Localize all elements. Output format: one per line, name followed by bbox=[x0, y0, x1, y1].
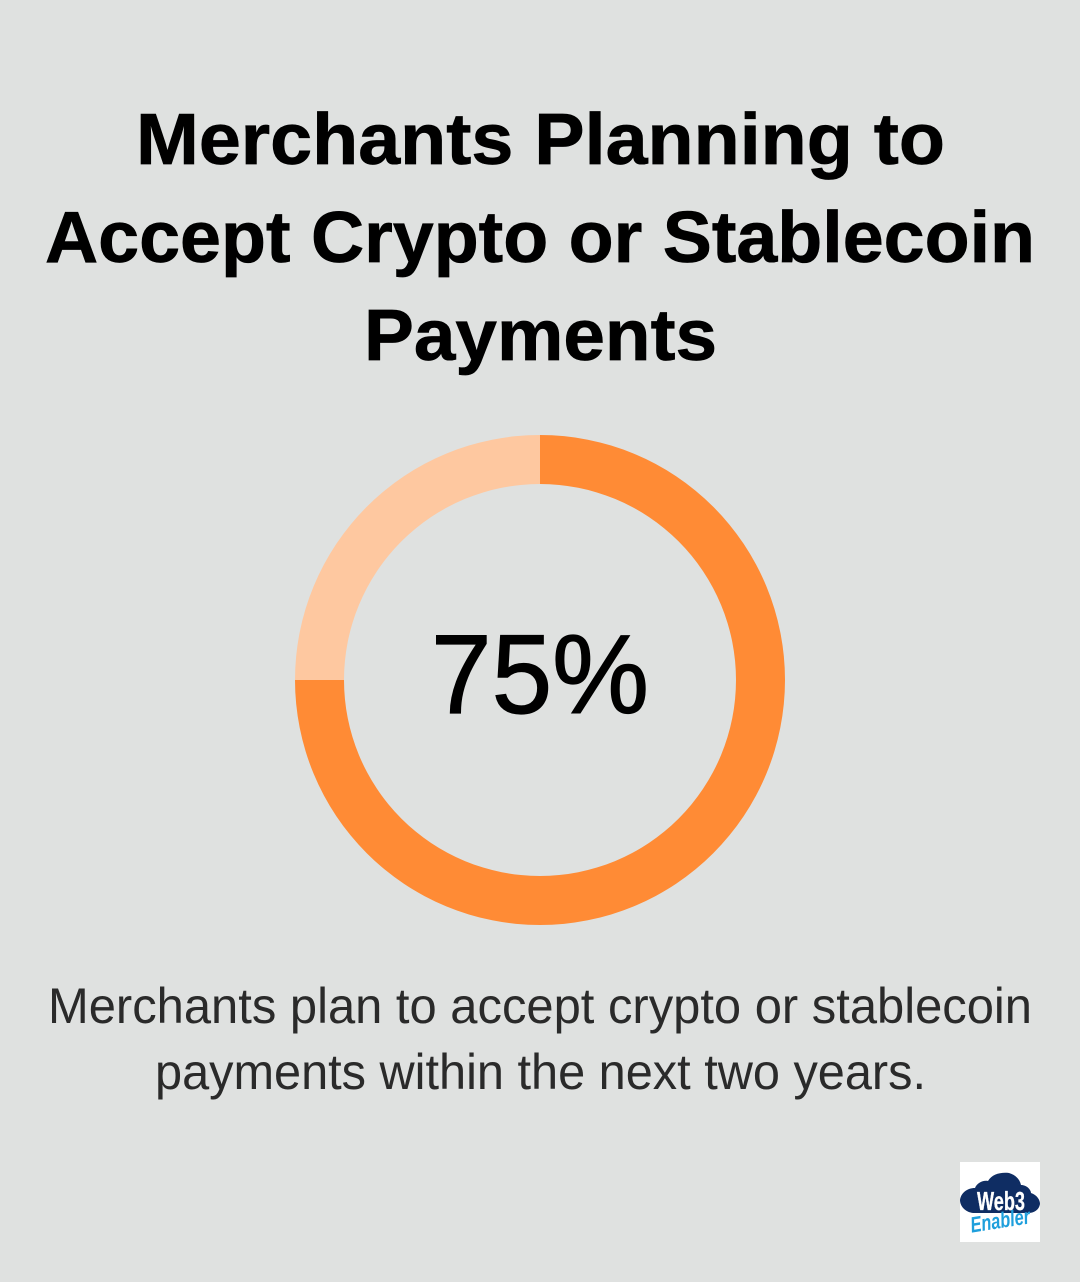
title bbox=[45, 100, 1035, 376]
logo script: Enabler bbox=[968, 1203, 1033, 1238]
description text bbox=[48, 978, 1032, 1100]
logo wordmark: Web3 bbox=[977, 1186, 1025, 1216]
title: Merchants Planning to bbox=[136, 100, 945, 180]
highlighted 75% segment bbox=[295, 435, 785, 925]
description text: payments within the next two years. bbox=[155, 1044, 926, 1100]
donut chart: 75% bbox=[295, 435, 785, 925]
description text: Merchants plan to accept crypto or stablecoin bbox=[48, 978, 1032, 1034]
title: Accept Crypto or Stablecoin bbox=[45, 198, 1035, 278]
logo: Web3 Enabler bbox=[960, 1162, 1040, 1242]
logo cloud bbox=[960, 1173, 1040, 1213]
title: Payments bbox=[364, 296, 717, 376]
remaining 25% segment bbox=[295, 435, 540, 680]
center value: 75% bbox=[431, 612, 649, 737]
